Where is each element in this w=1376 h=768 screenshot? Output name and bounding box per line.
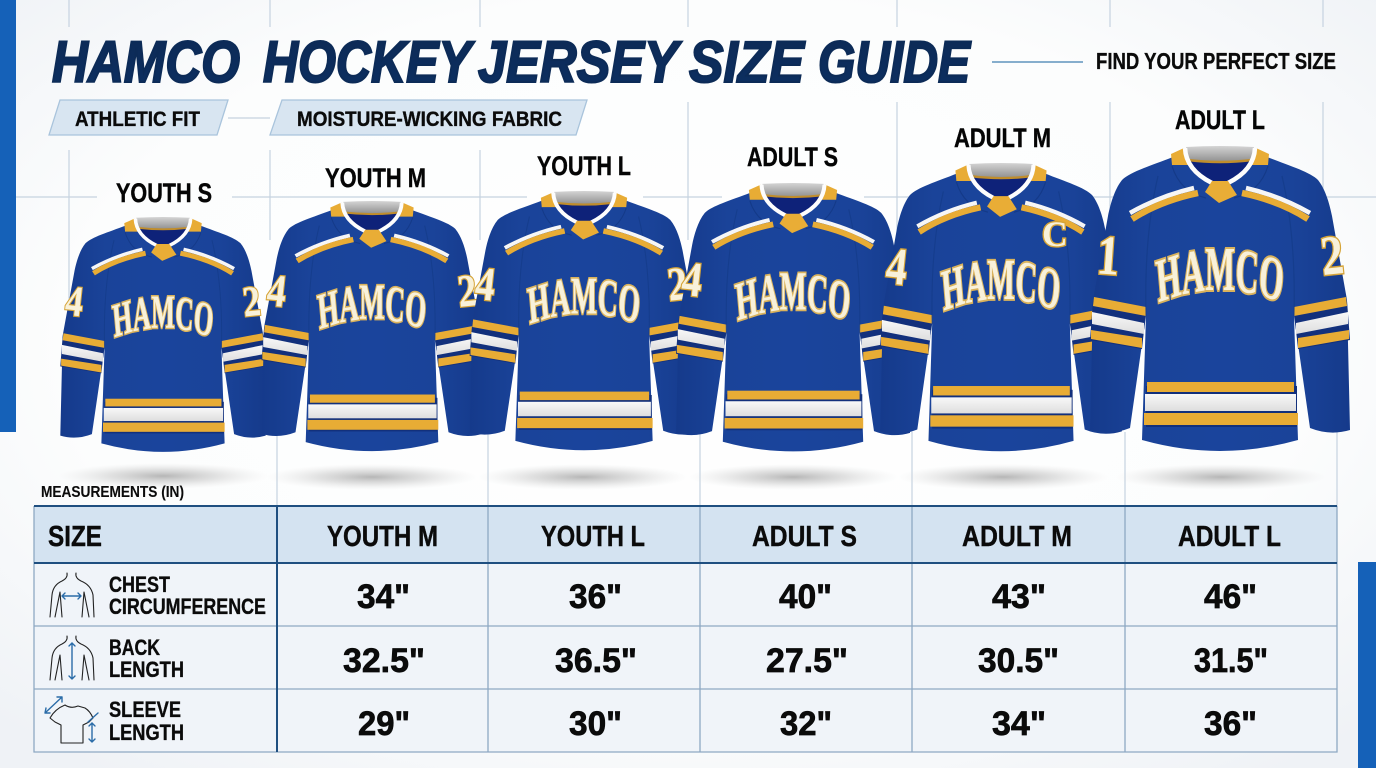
row label: back length: [109, 635, 184, 682]
row label: back length: LENGTH: [109, 657, 184, 682]
row label: chest circumference: [109, 572, 266, 619]
title: HAMCO: [52, 30, 240, 95]
jersey: youth s: 2: [240, 277, 263, 326]
row label: back length: BACK: [109, 635, 160, 660]
jersey: youth l: 2: [665, 258, 690, 312]
table header row: ADULT M: [962, 521, 1072, 553]
row values: chest: [357, 578, 1257, 616]
right accent bar: [1358, 562, 1376, 768]
table header row: ADULT S: [752, 521, 857, 553]
row label: chest circumference: CHEST: [109, 572, 170, 597]
jersey: youth m: HAMCO: [316, 284, 426, 331]
row values: back: 36.5": [555, 642, 637, 680]
measurements caption: MEASUREMENTS (IN): [41, 484, 184, 501]
jersey shadows: [58, 463, 1326, 490]
jersey: adult s: [676, 183, 910, 452]
label: adult s: ADULT S: [747, 142, 838, 172]
row label: chest circumference: CIRCUMFERENCE: [109, 594, 266, 619]
row values: sleeve: [358, 705, 1257, 743]
label: adult m: ADULT M: [954, 123, 1051, 153]
row label: sleeve length: LENGTH: [109, 720, 184, 745]
jersey: youth l: 4: [473, 258, 498, 312]
badge: athletic fit: [49, 100, 228, 135]
row values: chest: 46": [1204, 578, 1257, 616]
label: youth s: YOUTH S: [116, 178, 212, 208]
title: JERSEY: [478, 30, 683, 95]
row values: back: 30.5": [978, 642, 1059, 680]
jersey: adult m: HAMCO: [940, 258, 1060, 313]
jersey: youth s: 4: [63, 277, 86, 326]
jersey: youth s: [60, 217, 266, 452]
jersey: adult s: HAMCO: [734, 272, 850, 322]
row values: back: 27.5": [766, 642, 848, 680]
badge: athletic fit: ATHLETIC FIT: [75, 108, 200, 131]
badge: moisture-wicking fabric: [270, 100, 587, 135]
label: youth m: YOUTH M: [325, 163, 426, 193]
jersey: adult m: 4: [883, 238, 910, 297]
jersey: adult l: 1: [1095, 224, 1122, 287]
table header row: YOUTH M: [327, 521, 438, 553]
title: GUIDE: [818, 30, 972, 95]
badge: moisture-wicking fabric: MOISTURE-WICKING FABRIC: [297, 108, 562, 131]
icon: chest measurement: [50, 573, 94, 617]
jersey: youth m: [262, 201, 482, 452]
icon: back measurement: [50, 636, 94, 680]
row label: sleeve length: [109, 697, 184, 745]
row values: back: 32.5": [343, 642, 425, 680]
row values: chest: 40": [779, 578, 832, 616]
icon: sleeve measurement: [45, 697, 98, 743]
table header row: SIZE: [48, 521, 102, 553]
row values: sleeve: 30": [569, 705, 622, 743]
table header row: YOUTH L: [541, 521, 645, 553]
jersey: adult l: HAMCO: [1154, 247, 1284, 304]
label: adult l: ADULT L: [1175, 105, 1265, 135]
row label: sleeve length: SLEEVE: [109, 697, 181, 722]
jersey: youth s: HAMCO: [110, 295, 214, 339]
title: SIZE: [689, 30, 806, 95]
jersey: adult l: [1090, 146, 1350, 451]
table header row: ADULT L: [1178, 521, 1281, 553]
row values: sleeve: 36": [1204, 705, 1257, 743]
jersey: adult l: 2: [1318, 223, 1346, 287]
table header row: [48, 521, 1281, 553]
row values: back: 31.5": [1194, 642, 1268, 680]
jersey: adult m: C: [1042, 214, 1068, 254]
jersey: youth l: HAMCO: [526, 277, 640, 326]
row values: sleeve: 34": [992, 705, 1046, 743]
size table: [34, 506, 1337, 752]
left accent bar: [0, 0, 16, 432]
jersey: adult m: [880, 163, 1122, 452]
row values: chest: 34": [357, 578, 410, 616]
row values: chest: 43": [992, 578, 1046, 616]
title: HOCKEY: [263, 30, 475, 95]
jersey: adult s: 4: [679, 251, 705, 308]
jersey: youth l: [470, 191, 690, 450]
label: youth l: YOUTH L: [537, 151, 631, 181]
row values: sleeve: 32": [780, 705, 832, 743]
jersey: youth m: 4: [264, 265, 289, 318]
row values: chest: 36": [569, 578, 622, 616]
jersey: youth m: 2: [455, 265, 480, 318]
row values: back: [343, 642, 1268, 680]
row values: sleeve: 29": [358, 705, 410, 743]
title: [52, 30, 972, 95]
